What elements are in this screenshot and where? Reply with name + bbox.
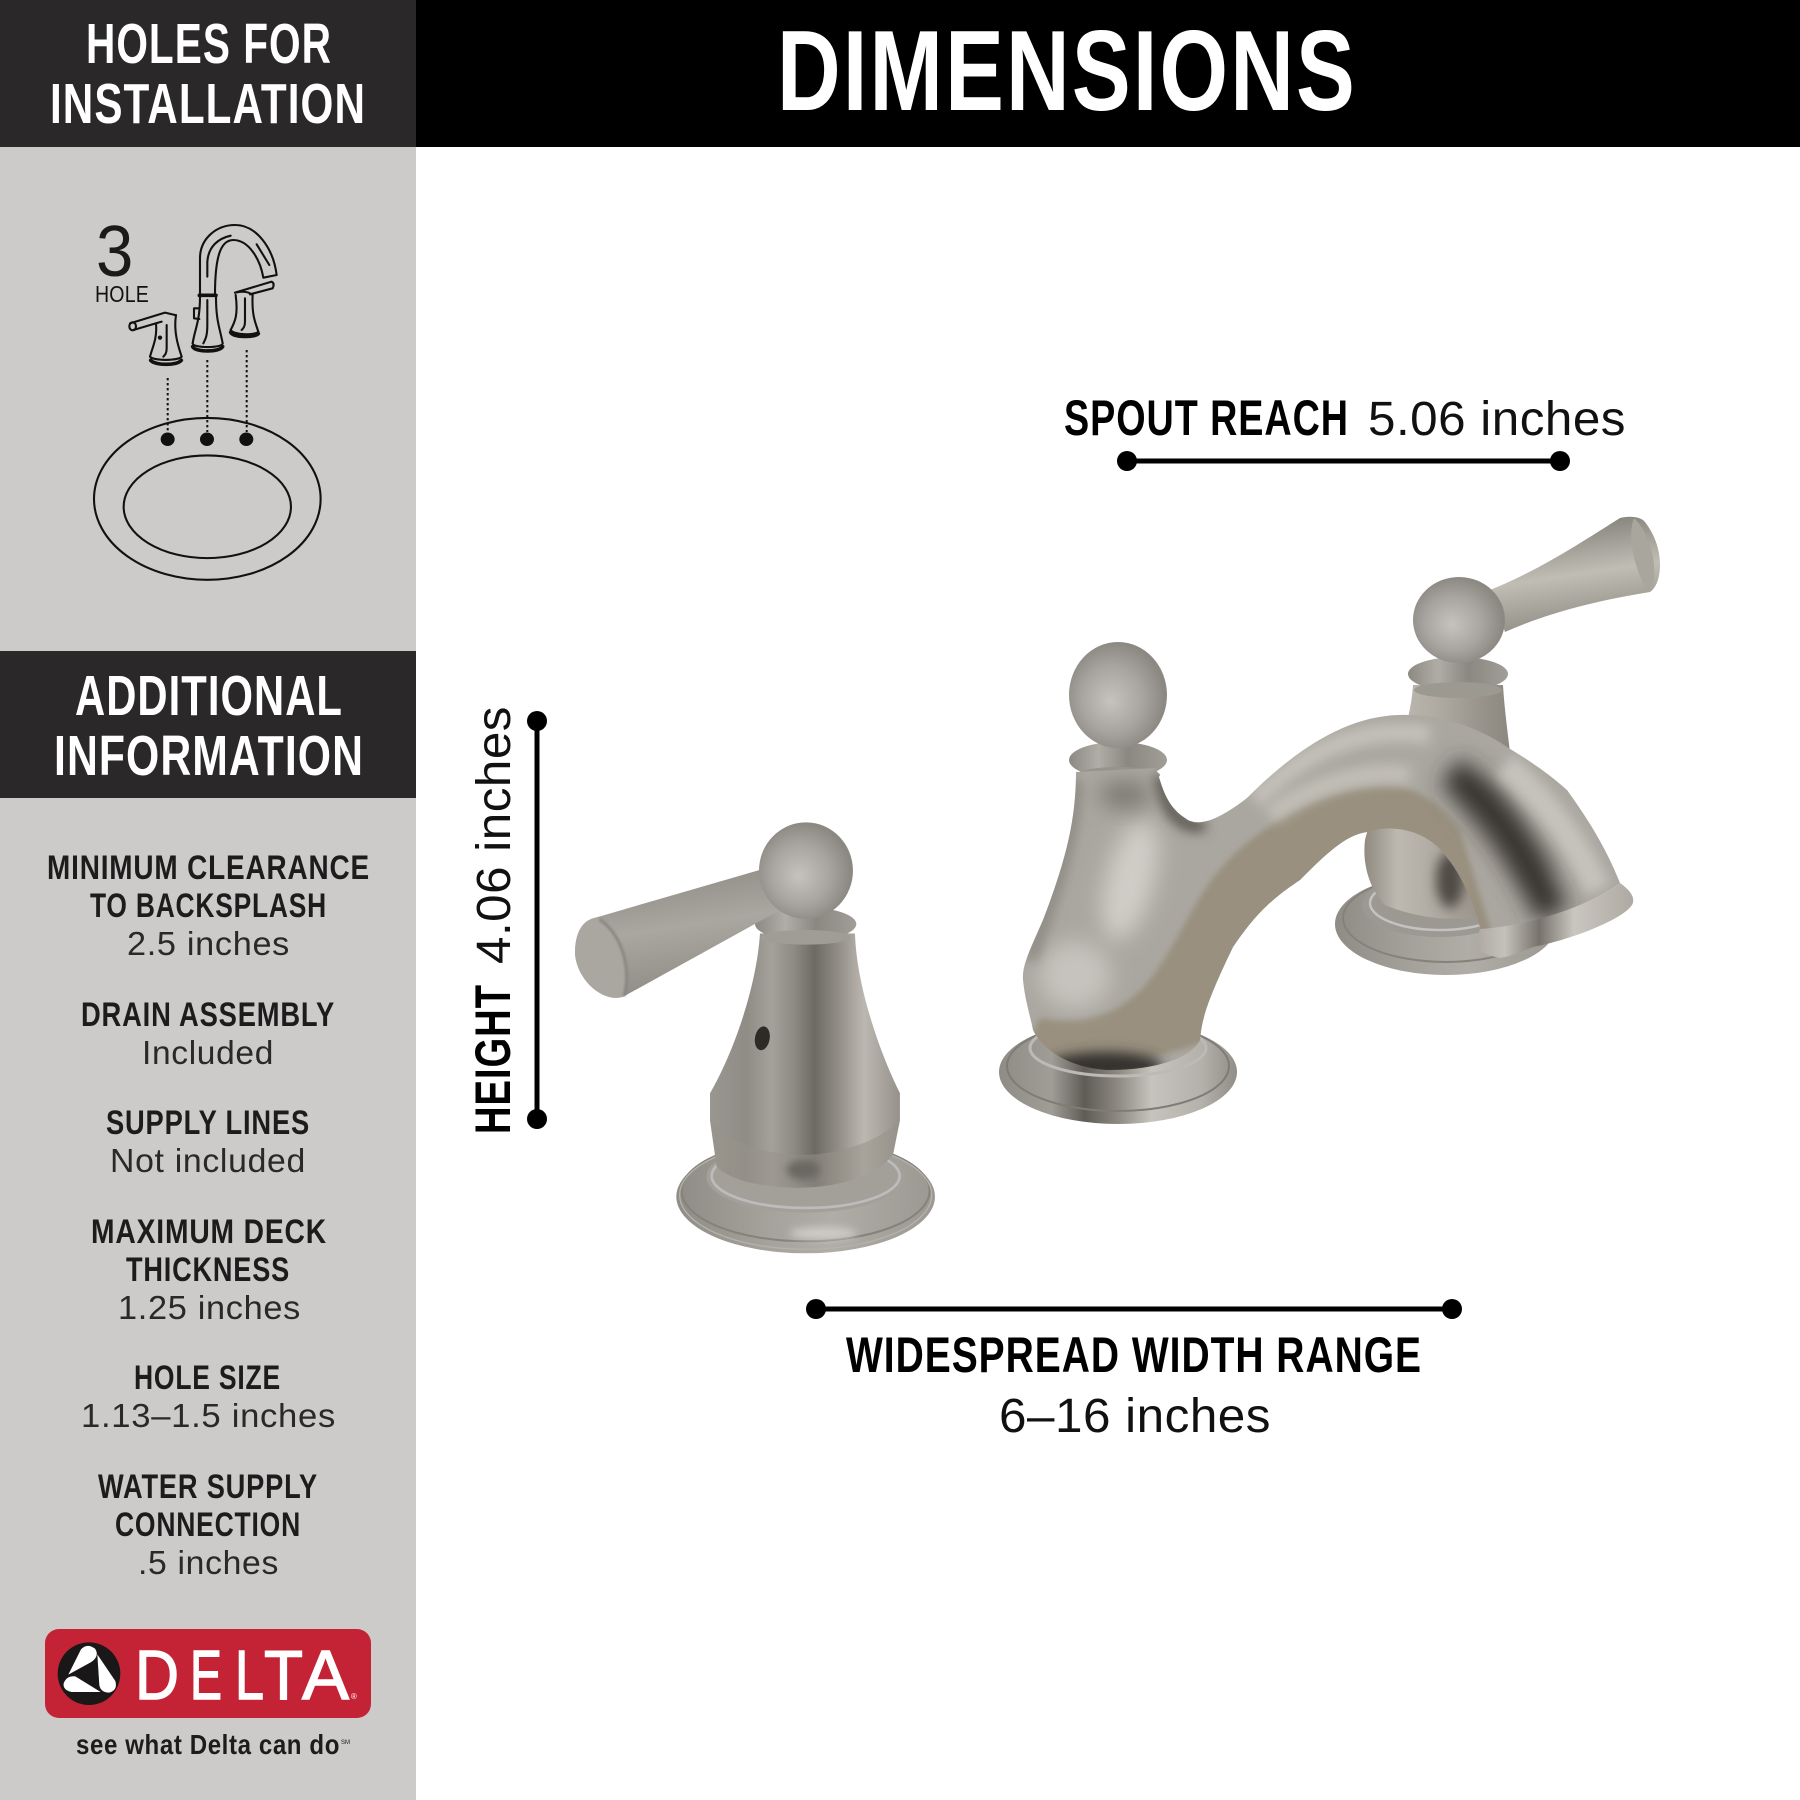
- spec: supply lines: [106, 1104, 310, 1179]
- handle collar: [755, 907, 856, 945]
- faucet: back handle: [1335, 517, 1660, 975]
- spec: hole size: HOLE SIZE: [134, 1359, 281, 1397]
- hole label: HOLE: [95, 281, 149, 307]
- spout body: [1022, 714, 1620, 1070]
- body highlights: [1094, 816, 1166, 944]
- faucet: front handle: [575, 822, 935, 1253]
- outer highlight: [1505, 765, 1598, 890]
- icon: delta triangle mark: [58, 1642, 120, 1705]
- handle lever: [575, 866, 788, 998]
- back handle ball: [1413, 577, 1505, 663]
- spout base: [999, 1020, 1237, 1124]
- spec: hole size: [81, 1359, 336, 1434]
- spec: drain assembly: [81, 996, 335, 1071]
- dimension: spout reach: SPOUT REACH: [1064, 390, 1349, 446]
- arch highlights: [1255, 733, 1430, 800]
- taupe underside: [1032, 786, 1492, 1060]
- logo: delta: ®: [351, 1692, 357, 1701]
- spec: maximum deck thickness: 1.25 inches: [118, 1289, 301, 1326]
- heading: additional information: INFORMATION: [54, 724, 364, 788]
- screw hole: [753, 1025, 772, 1051]
- handle bell body: [710, 934, 900, 1188]
- dimension: widespread width range: [806, 1299, 1462, 1443]
- spec: minimum clearance: MINIMUM CLEARANCE: [47, 849, 370, 887]
- logo: delta: SM: [341, 1740, 350, 1746]
- shadow at base: [1047, 1052, 1163, 1080]
- arrow: spout reach measure line: [1117, 451, 1570, 471]
- heading: holes for installation: HOLES FOR: [86, 12, 332, 76]
- handle ball: [759, 822, 853, 919]
- dimension: height: [465, 706, 547, 1134]
- back handle lever: [1490, 517, 1660, 632]
- tagline: see what Delta can do: [76, 1729, 340, 1760]
- spec: maximum deck thickness: [91, 1213, 327, 1326]
- spec: water supply connection: CONNECTION: [115, 1506, 301, 1544]
- spec: supply lines: SUPPLY LINES: [106, 1104, 310, 1142]
- spec: water supply connection: WATER SUPPLY: [98, 1468, 318, 1506]
- spec: minimum clearance: 2.5 inches: [127, 925, 290, 962]
- dimension: spout reach: [1064, 390, 1626, 471]
- faucet line art: [129, 225, 277, 364]
- wordmark: [135, 1636, 349, 1714]
- back handle body: [1364, 685, 1515, 919]
- front knob collar: [1069, 742, 1167, 783]
- heading: additional information: [0, 651, 416, 798]
- faucet: spout: [999, 642, 1660, 1124]
- arrow: width measure line: [806, 1299, 1462, 1319]
- number 3 label: 3: [96, 212, 134, 292]
- back handle collar: [1408, 657, 1508, 698]
- header bar: dimensions: [416, 0, 1800, 147]
- front knob ball: [1069, 642, 1167, 748]
- spec: minimum clearance: [47, 849, 370, 962]
- arrow: height measure line: [527, 711, 547, 1129]
- wordmark: L: [235, 1636, 264, 1714]
- dotted guide lines: [168, 350, 247, 432]
- dimension: height: 4.06 inches: [468, 706, 521, 964]
- wordmark: E: [190, 1636, 222, 1714]
- dimension: height: HEIGHT: [465, 984, 521, 1134]
- title: DIMENSIONS: [777, 8, 1357, 135]
- lower chamfer: [710, 1120, 900, 1188]
- spec: hole size: 1.13–1.5 inches: [81, 1397, 336, 1434]
- spec: maximum deck thickness: THICKNESS: [126, 1251, 290, 1289]
- dark band: [1450, 772, 1552, 915]
- logo: delta: [45, 1629, 371, 1760]
- holes and basin: [94, 418, 321, 580]
- heading: holes for installation: [0, 0, 416, 147]
- panel: left sidebar: [0, 0, 416, 1800]
- handle base: [676, 1140, 935, 1253]
- spec: drain assembly: DRAIN ASSEMBLY: [81, 996, 335, 1034]
- lever tip: [575, 917, 627, 998]
- dimension: widespread width range: 6–16 inches: [999, 1390, 1271, 1443]
- spec: drain assembly: Included: [142, 1034, 274, 1071]
- wordmark: D: [135, 1636, 179, 1714]
- heading: holes for installation: INSTALLATION: [50, 72, 366, 136]
- spec: water supply connection: .5 inches: [138, 1544, 279, 1581]
- spec: minimum clearance: TO BACKSPLASH: [90, 887, 327, 925]
- spout nozzle rim: [1477, 883, 1633, 958]
- spec: maximum deck thickness: MAXIMUM DECK: [91, 1213, 327, 1251]
- spec: water supply connection: [98, 1468, 318, 1581]
- heading: additional information: ADDITIONAL: [75, 664, 343, 728]
- back handle base: [1335, 873, 1557, 975]
- neck shadow: [1160, 775, 1205, 826]
- wordmark: A: [302, 1636, 349, 1714]
- wordmark: T: [264, 1636, 303, 1714]
- dimension: spout reach: 5.06 inches: [1368, 393, 1626, 446]
- icon: three hole faucet and basin diagram: [94, 212, 321, 580]
- spec: supply lines: Not included: [110, 1142, 306, 1179]
- dimension: widespread width range: WIDESPREAD WIDTH RANGE: [846, 1327, 1422, 1383]
